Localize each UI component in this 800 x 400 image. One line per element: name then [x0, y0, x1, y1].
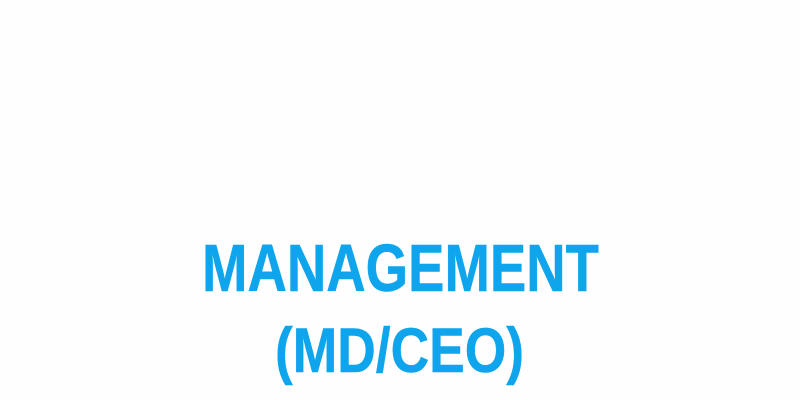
heading line: (MD/CEO): (MD/CEO) — [275, 316, 524, 386]
heading line: MANAGEMENT: MANAGEMENT — [202, 231, 599, 306]
